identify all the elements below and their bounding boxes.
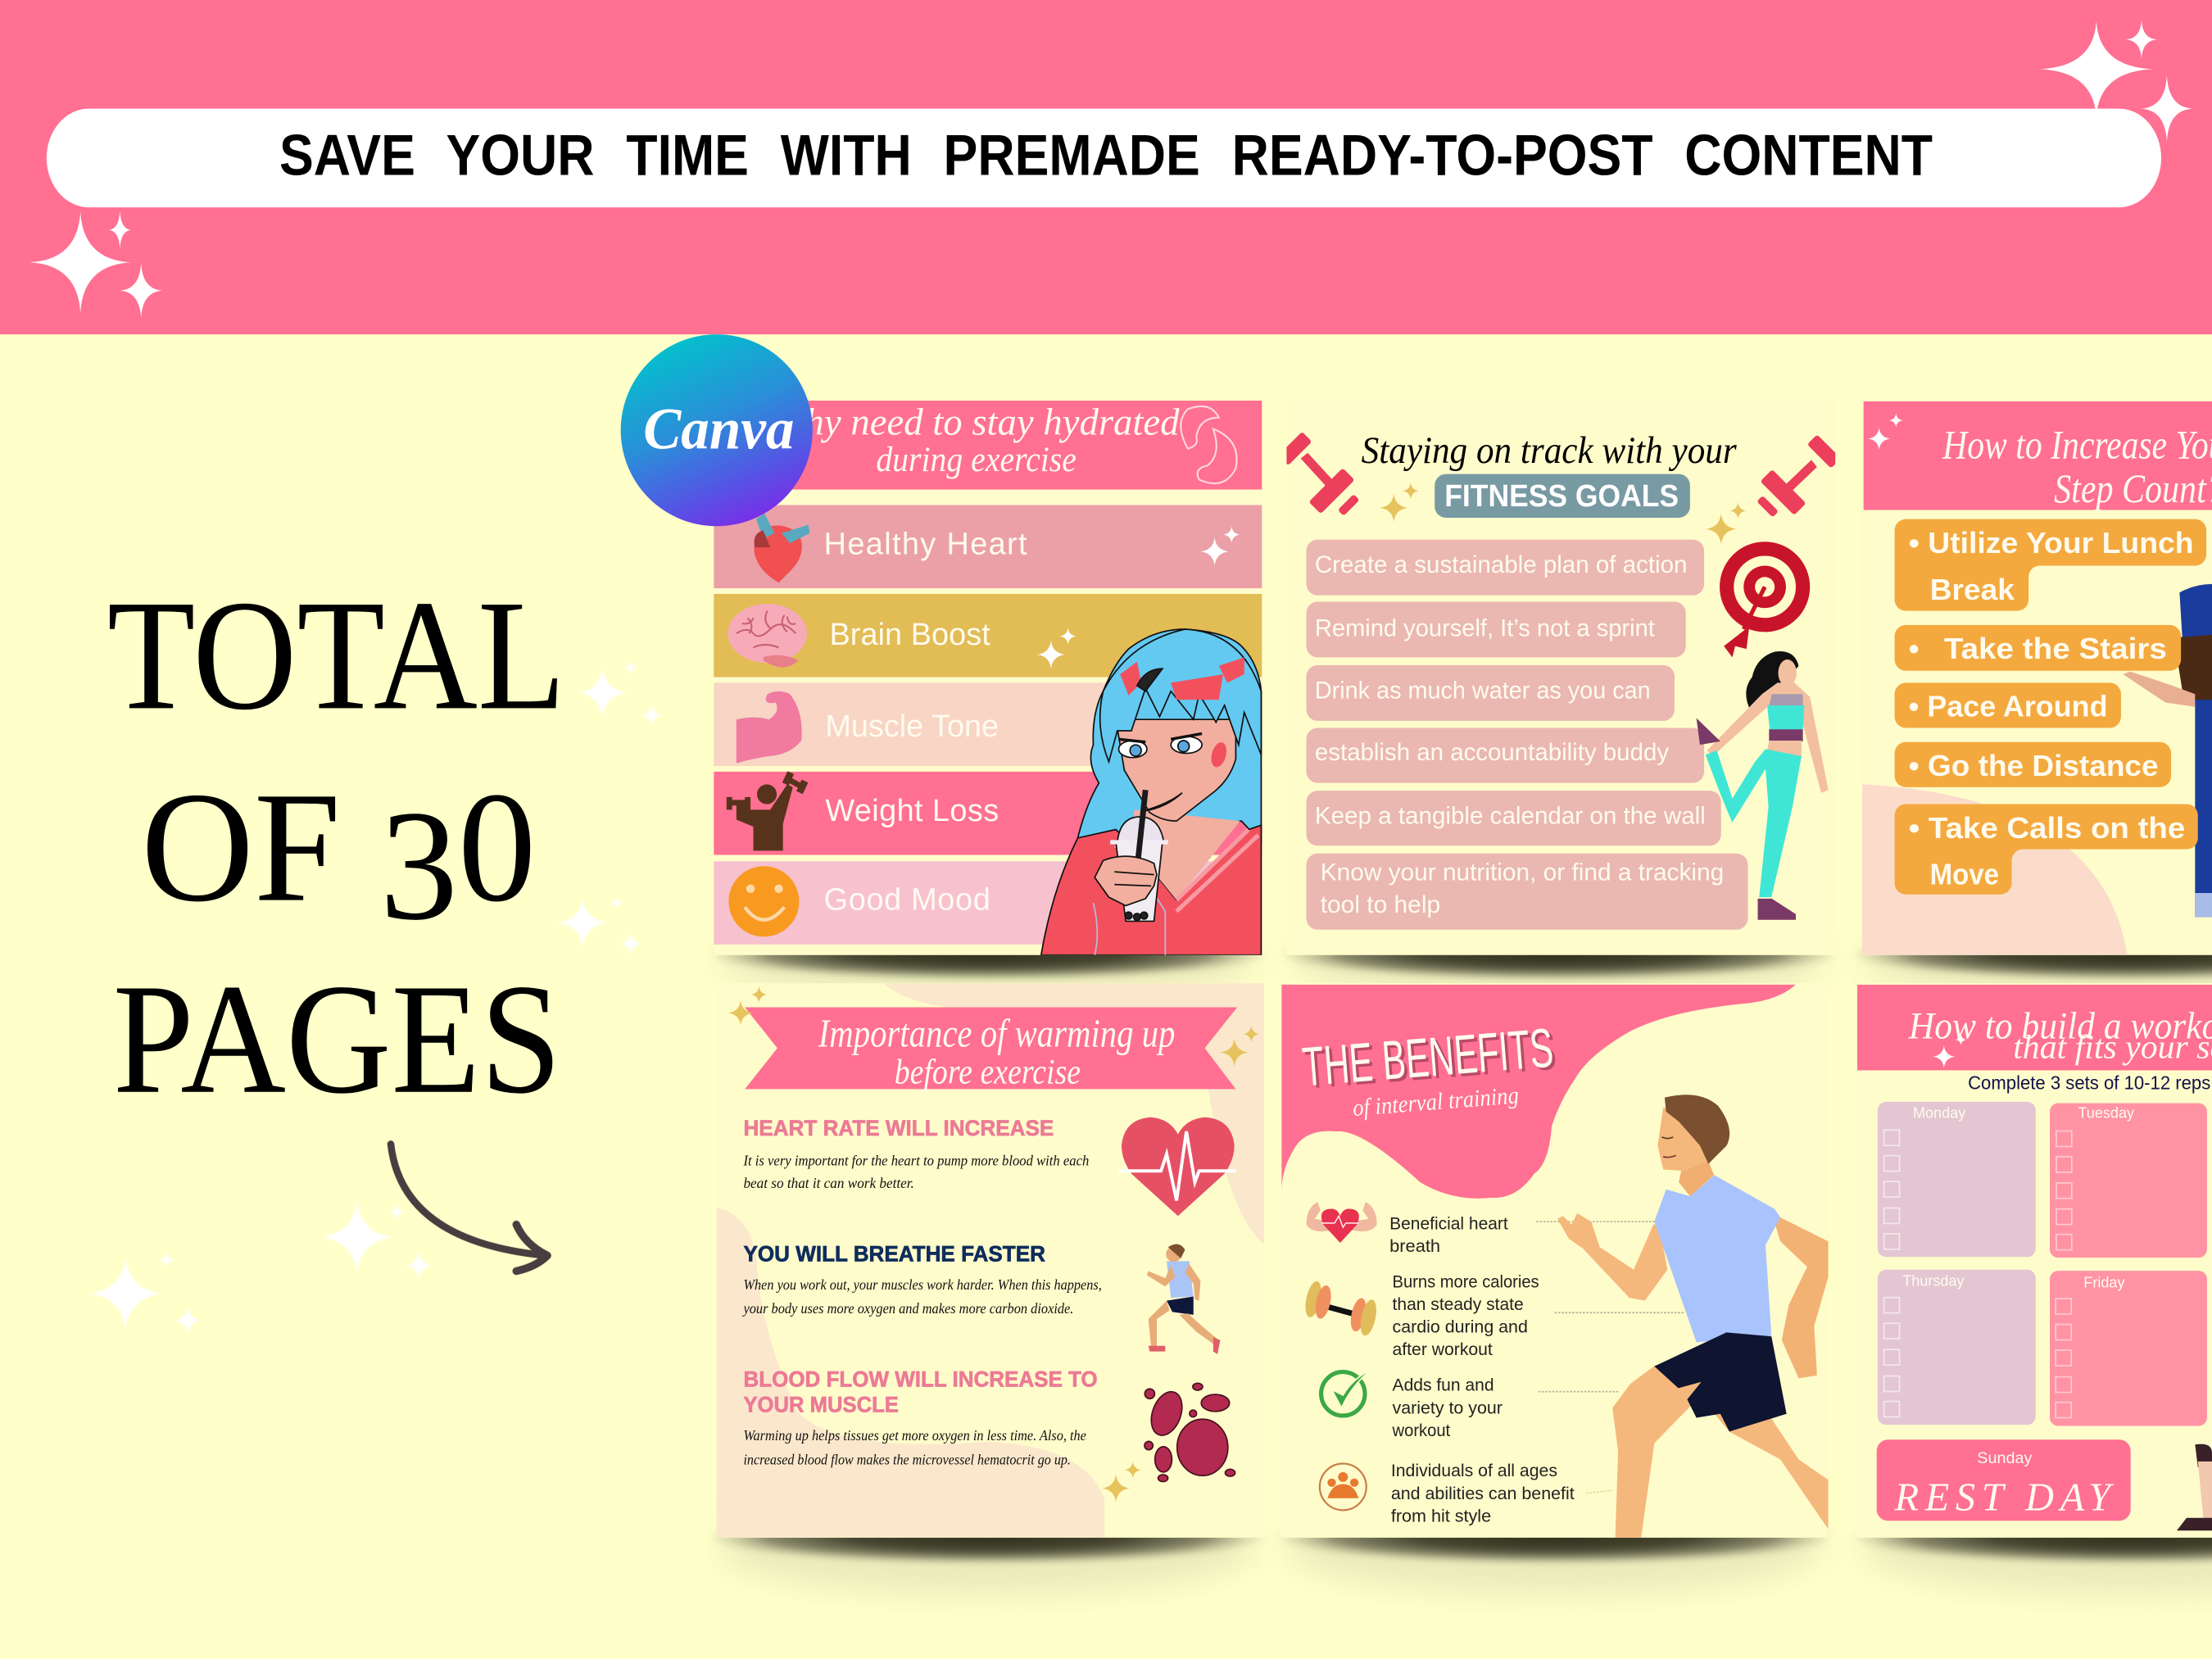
- peach shape: [1862, 784, 2128, 955]
- benefit 3: [1392, 1375, 1503, 1440]
- canva badge: Canva: [643, 397, 794, 462]
- header banner: [0, 0, 2212, 334]
- header sparkles: [29, 20, 2192, 319]
- benefit 2: [1393, 1271, 1539, 1359]
- panel: benefits of interval training: [1281, 983, 1829, 1538]
- large runner illustration: [1557, 1095, 1829, 1538]
- card: monday: Monday: [1913, 1104, 1965, 1121]
- panel: increase step count: [1862, 401, 2212, 955]
- step tips list: Move: [1930, 858, 1999, 891]
- step tips list: •: [1909, 632, 1919, 665]
- goal list: tool to help: [1321, 892, 1440, 918]
- card: sunday rest day: Sunday: [1977, 1449, 2033, 1467]
- total pages heading: 0: [458, 759, 536, 935]
- goal list: Create a sustainable plan of action: [1315, 552, 1687, 578]
- benefit 4: [1391, 1461, 1575, 1525]
- leader lines: [1536, 1222, 1684, 1494]
- benefit 3: variety to your: [1393, 1398, 1503, 1417]
- benefit 2: after workout: [1393, 1339, 1493, 1359]
- goal list: [1307, 540, 1747, 930]
- step tips list: • Take Calls on the: [1909, 811, 2185, 845]
- panel: warming up: [717, 983, 1264, 1538]
- panel 5 title: THE BENEFITS: [1303, 1020, 1558, 1101]
- benefit 4: from hit style: [1391, 1506, 1491, 1525]
- row: good mood: Good Mood: [824, 883, 990, 918]
- woman stretching illustration: [1697, 651, 1829, 920]
- total pages heading: OF: [141, 759, 343, 935]
- row: brain boost: [714, 594, 1262, 678]
- icon: check mark: [1321, 1368, 1372, 1416]
- icon: heart with arms: [1307, 1202, 1377, 1243]
- row: weight loss: Weight Loss: [825, 794, 999, 828]
- row: healthy heart: [714, 505, 1262, 588]
- card: thursday: [1878, 1270, 2036, 1425]
- section: blood flow: Warming up helps tissues get more oxygen in less time. Also, the: [743, 1427, 1086, 1444]
- row: weight loss: [714, 772, 1262, 854]
- benefit 1: Beneficial heart: [1389, 1213, 1508, 1233]
- goal list: Drink as much water as you can: [1315, 678, 1651, 704]
- benefit 2: than steady state: [1393, 1294, 1524, 1314]
- row: muscle tone: [714, 682, 1262, 766]
- goal list: establish an accountability buddy: [1315, 740, 1669, 766]
- benefit 1: breath: [1389, 1236, 1440, 1256]
- benefit 3: workout: [1392, 1421, 1450, 1440]
- white sparkles on left column: [88, 660, 663, 1335]
- arrow: [391, 1144, 547, 1271]
- panel 1 title: Why need to stay hydrated: [773, 401, 1180, 443]
- row: healthy heart: Healthy Heart: [824, 528, 1027, 562]
- section: heart rate: [743, 1116, 1089, 1191]
- step tips list: Take the Stairs: [1944, 632, 2167, 665]
- step tips list: • Utilize Your Lunch: [1909, 526, 2194, 560]
- step tips list: • Pace Around: [1909, 690, 2108, 723]
- panel: why stay hydrated: [714, 401, 1262, 955]
- person illustration: [2124, 584, 2212, 917]
- ribbon title: before exercise: [895, 1053, 1081, 1091]
- card: friday: Friday: [2083, 1274, 2125, 1290]
- pink wave shape: [1281, 985, 1796, 1199]
- goal list: Know your nutrition, or find a tracking: [1321, 859, 1724, 886]
- icon: flexed muscle: [737, 691, 802, 764]
- section: blood flow: YOUR MUSCLE: [743, 1393, 899, 1417]
- icons: dumbbells: [1278, 432, 1841, 518]
- fitness goals badge: FITNESS GOALS: [1444, 479, 1679, 514]
- girl with bubble tea illustration: [1041, 629, 1261, 955]
- icon: weightlifter: [727, 771, 808, 850]
- panel 2 title: Staying on track with your: [1362, 430, 1738, 472]
- panel 6 title: [1908, 1005, 2212, 1065]
- panel 5 title: THE BENEFITS: [1300, 1018, 1556, 1098]
- goal list: Keep a tangible calendar on the wall: [1315, 804, 1706, 830]
- icon: heart with pulse: [1118, 1117, 1235, 1216]
- benefit 2: cardio during and: [1393, 1317, 1528, 1336]
- card: monday: [1878, 1102, 2036, 1257]
- sparkle: [1933, 1034, 1966, 1068]
- panel 6 header bar: [1857, 985, 2212, 1070]
- step tips list: • Go the Distance: [1909, 749, 2159, 782]
- icon: target: [1720, 542, 1810, 657]
- benefit 3: Adds fun and: [1393, 1375, 1494, 1394]
- canva badge: [621, 334, 813, 526]
- row: muscle tone: Muscle Tone: [825, 709, 999, 744]
- total pages heading: TOTAL: [107, 567, 565, 742]
- step tips list: Break: [1930, 573, 2015, 606]
- ribbon title: Importance of warming up: [818, 1013, 1175, 1056]
- total pages heading: 3: [380, 777, 458, 953]
- card: sunday rest day: REST DAY: [1894, 1476, 2115, 1520]
- icon: paw group: [1320, 1464, 1367, 1510]
- total pages heading: [107, 567, 565, 1126]
- section: heart rate: It is very important for the heart to pump more blood with each: [743, 1152, 1089, 1168]
- card: sunday rest day: [1877, 1439, 2131, 1521]
- gold sparkles: [1380, 483, 1747, 545]
- benefit 4: Individuals of all ages: [1391, 1461, 1557, 1480]
- icon: anatomical heart: [754, 514, 809, 582]
- section: breathe faster: [742, 1241, 1102, 1317]
- panel 1 header bar: [762, 401, 1262, 490]
- section: breathe faster: your body uses more oxygen and makes more carbon dioxide.: [742, 1300, 1073, 1317]
- panel 5 title: of interval training: [1352, 1082, 1520, 1122]
- icon: small runner: [1147, 1244, 1220, 1354]
- ribbon title: [745, 1007, 1237, 1091]
- benefit texts: [1389, 1213, 1575, 1525]
- section: blood flow: [743, 1367, 1098, 1467]
- panel 5 title: [1300, 1017, 1561, 1126]
- benefit 1: [1389, 1213, 1508, 1256]
- section: blood flow: increased blood flow makes the microvessel hematocrit go up.: [743, 1451, 1071, 1467]
- step tips list: [1895, 519, 2206, 895]
- card: thursday: Thursday: [1902, 1273, 1965, 1290]
- sparkles: [1868, 414, 1903, 450]
- card: friday: [2050, 1271, 2207, 1426]
- panel: fitness goals: [1278, 401, 1841, 955]
- peach background shapes: [717, 983, 1264, 1538]
- row: brain boost: Brain Boost: [829, 618, 990, 652]
- gold sparkles: [728, 986, 1260, 1503]
- card: tuesday: [2050, 1104, 2207, 1258]
- section: blood flow: BLOOD FLOW WILL INCREASE TO: [743, 1367, 1098, 1392]
- goal list: Remind yourself, It’s not a sprint: [1315, 616, 1655, 642]
- panel 3 title: [1942, 423, 2212, 511]
- person on yoga mat: [2177, 1444, 2212, 1530]
- kidney outline icon: [1181, 406, 1237, 483]
- white pill: [47, 109, 2161, 207]
- icon: dumbbell: [1303, 1280, 1379, 1337]
- icon: smiley: [728, 866, 799, 936]
- section: heart rate: beat so that it can work better.: [743, 1175, 914, 1191]
- benefit 2: Burns more calories: [1393, 1271, 1539, 1291]
- benefit 4: and abilities can benefit: [1391, 1484, 1575, 1503]
- panel 1 title: [773, 401, 1180, 479]
- panel: build a workout schedule: [1856, 983, 2212, 1538]
- panel 3 header bar: [1864, 401, 2212, 510]
- panel shadows: [713, 926, 2212, 1593]
- section: breathe faster: When you work out, your muscles work harder. When this happens,: [743, 1276, 1102, 1293]
- total pages heading: PAGES: [113, 951, 561, 1126]
- icon: brain: [728, 604, 807, 667]
- headline: SAVE YOUR TIME WITH PREMADE READY-TO-POST CONTENT: [279, 123, 1933, 188]
- panel 1 title: during exercise: [876, 441, 1077, 479]
- card: tuesday: Tuesday: [2078, 1104, 2134, 1121]
- row: good mood: [714, 861, 1262, 945]
- section: heart rate: HEART RATE WILL INCREASE: [743, 1116, 1054, 1140]
- section: breathe faster: YOU WILL BREATHE FASTER: [743, 1241, 1045, 1266]
- icon: blood cells: [1145, 1383, 1235, 1482]
